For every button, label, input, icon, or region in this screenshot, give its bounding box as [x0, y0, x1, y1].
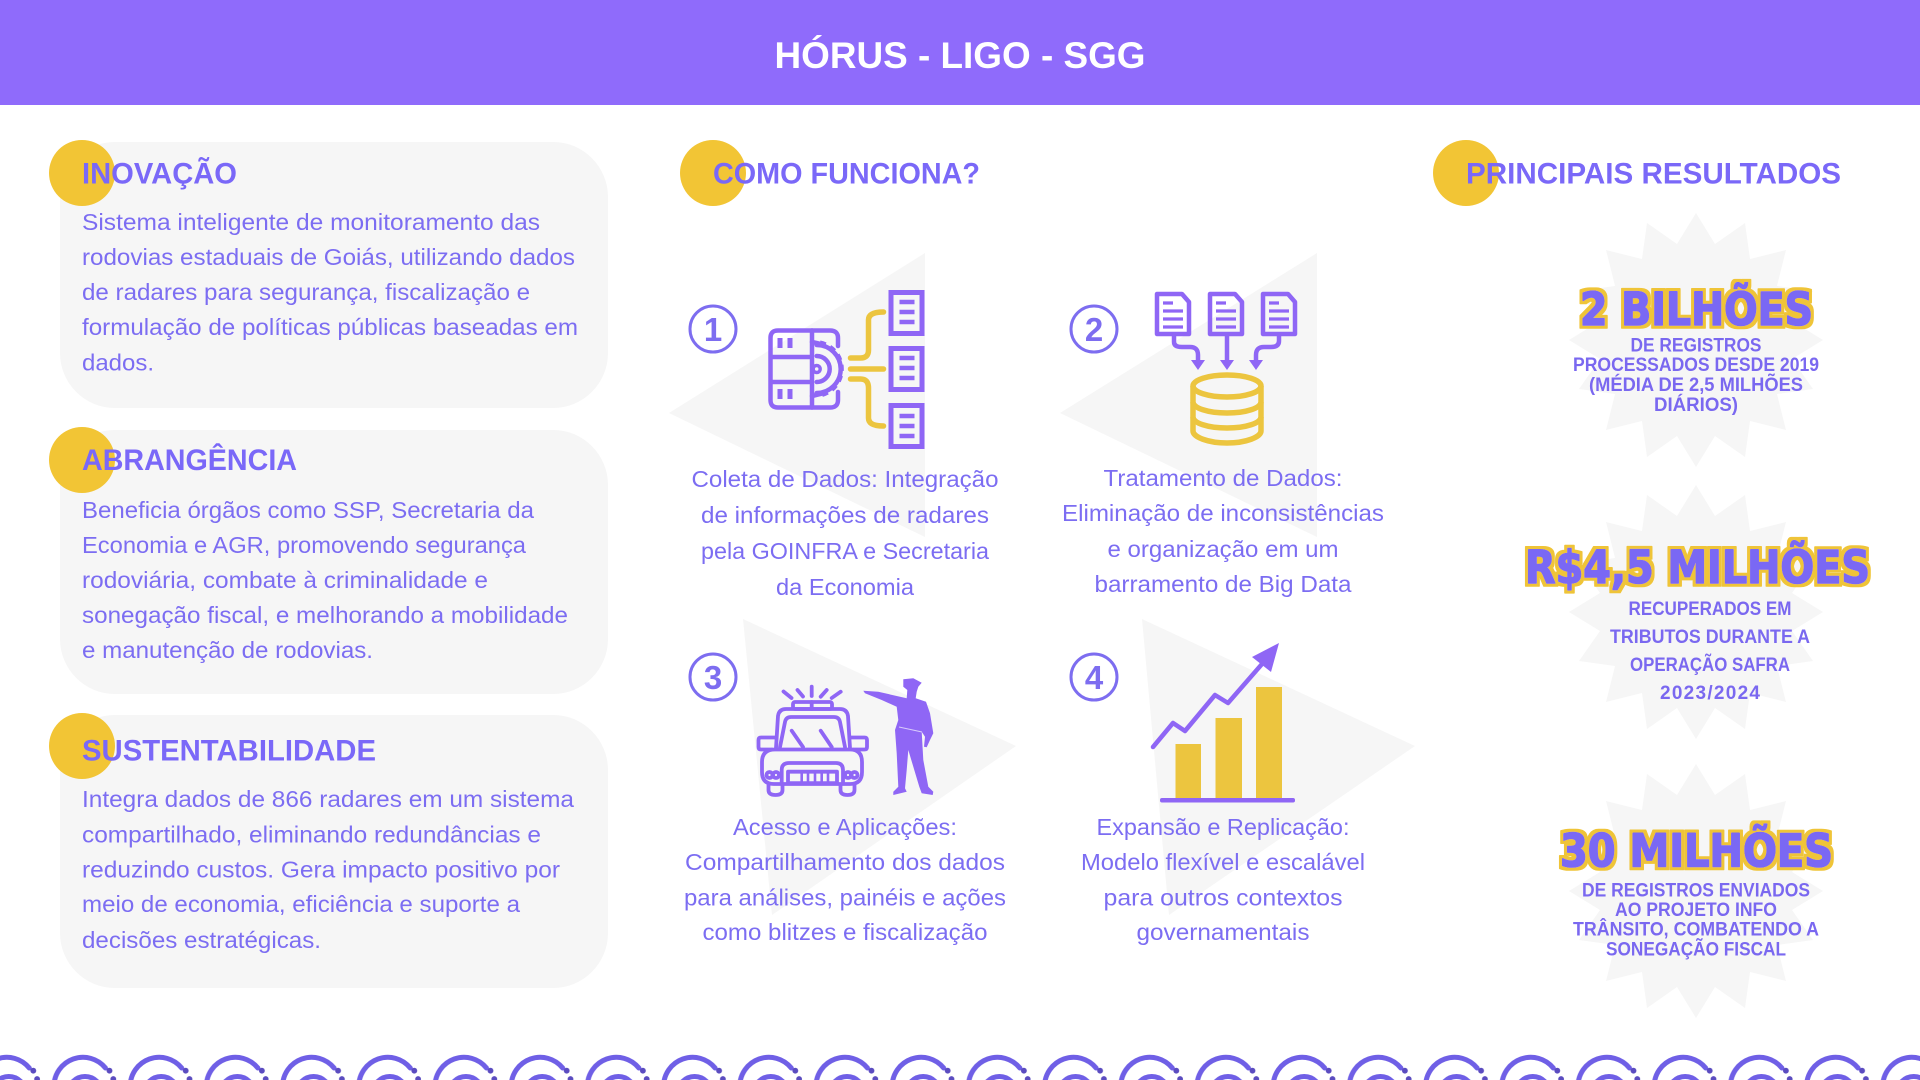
heading: como funciona [680, 140, 980, 206]
text block: result 1: DE REGISTROS [1630, 336, 1762, 356]
text block: inovação [82, 209, 578, 376]
text block: result 3 [1573, 880, 1819, 960]
text block: sustentabilidade: decisões estratégicas. [82, 927, 321, 953]
text block: result 1: PROCESSADOS DESDE 2019 [1573, 355, 1819, 376]
text block: abrangência: rodoviária, combate à criminalidade e [82, 567, 488, 593]
text block: sustentabilidade: meio de economia, eficiência e suporte a [82, 891, 521, 917]
step 1: coleta de dados [669, 253, 998, 600]
text block: result 1: (MÉDIA DE 2,5 MILHÕES [1589, 374, 1803, 396]
text block: sustentabilidade [82, 786, 575, 953]
text block: step 3: Compartilhamento dos dados [685, 849, 1005, 875]
big number: 30 milhões: 30 MILHÕES [1560, 824, 1833, 878]
text block: result 2: 2023/2024 [1660, 683, 1760, 704]
result: r$4,5 milhões [1525, 485, 1870, 739]
panel: abrangência [49, 427, 608, 694]
text block: inovação: formulação de políticas públicas baseadas em [82, 314, 578, 340]
text block: step 3 [684, 814, 1006, 945]
text block: step 4: para outros contextos [1104, 884, 1342, 910]
heading: principais resultados: PRINCIPAIS RESULTADOS [1466, 158, 1841, 190]
text block: abrangência: sonegação fiscal, e melhorando a mobilidade [82, 602, 568, 628]
text block: result 3: TRÂNSITO, COMBATENDO A [1573, 918, 1819, 940]
text block: step 4 [1081, 814, 1365, 945]
text block: result 2: RECUPERADOS EM [1628, 599, 1792, 620]
heading: principais resultados [1433, 140, 1841, 206]
text block: inovação: dados. [82, 350, 154, 376]
text block: result 2: TRIBUTOS DURANTE A [1610, 627, 1810, 648]
text block: step 2 [1062, 465, 1384, 597]
text block: inovação: rodovias estaduais de Goiás, utilizando dados [82, 244, 575, 270]
text block: step 1: pela GOINFRA e Secretaria [701, 538, 990, 564]
text block: result 2 [1610, 599, 1810, 704]
icon: number 1: 1 [704, 311, 722, 348]
heading: sustentabilidade: SUSTENTABILIDADE [82, 734, 376, 768]
text block: abrangência: Economia e AGR, promovendo segurança [82, 532, 527, 558]
icon: number 2 [1071, 306, 1117, 352]
text block: step 4: Expansão e Replicação: [1096, 814, 1350, 840]
big number: 2 bilhões: 2 BILHÕES [1580, 283, 1813, 336]
step 2: tratamento de dados [1060, 253, 1384, 597]
text block: result 3: AO PROJETO INFO [1615, 900, 1777, 921]
icon: growth chart [1153, 643, 1295, 802]
icon: number 3 [690, 654, 736, 700]
text block: sustentabilidade: Integra dados de 866 radares em um sistema [82, 786, 575, 812]
text block: inovação: Sistema inteligente de monitoramento das [82, 209, 540, 235]
icon: number 4: 4 [1085, 659, 1104, 696]
text block: sustentabilidade: compartilhado, eliminando redundâncias e [82, 822, 541, 848]
text block: abrangência: Beneficia órgãos como SSP, Secretaria da [82, 497, 535, 523]
icon: police car [758, 687, 867, 795]
text block: step 2: e organização em um [1108, 536, 1338, 562]
text block: step 4: Modelo flexível e escalável [1081, 849, 1365, 875]
text block: step 2: barramento de Big Data [1094, 571, 1352, 597]
heading: abrangência: ABRANGÊNCIA [82, 443, 297, 477]
text block: result 3: SONEGAÇÃO FISCAL [1606, 938, 1786, 960]
text block: result 3: DE REGISTROS ENVIADOS [1582, 880, 1810, 902]
icon: server and documents [770, 292, 922, 446]
text block: result 1: DIÁRIOS) [1654, 394, 1738, 416]
step 3: acesso e aplicações [684, 619, 1016, 945]
text block: step 1: de informações de radares [701, 502, 989, 528]
title: HÓRUS - LIGO - SGG [774, 34, 1146, 76]
text block: step 3: como blitzes e fiscalização [702, 919, 988, 945]
icon: documents into database [1157, 294, 1295, 443]
text block: step 3: Acesso e Aplicações: [733, 814, 957, 840]
text block: step 2: Eliminação de inconsistências [1062, 500, 1384, 526]
icon: number 4 [1071, 654, 1117, 700]
panel: sustentabilidade [49, 713, 608, 988]
icon: police officer [863, 678, 933, 795]
step 4: expansão e replicação [1071, 619, 1415, 945]
icon: number 3: 3 [704, 659, 722, 696]
text block: result 2: OPERAÇÃO SAFRA [1630, 654, 1790, 676]
result: 2 bilhões [1569, 213, 1823, 467]
icon: number 1 [690, 306, 736, 352]
result: 30 milhões [1560, 764, 1833, 1018]
big number: r$4,5 milhões: R$4,5 MILHÕES [1525, 541, 1870, 594]
text block: step 4: governamentais [1136, 919, 1310, 945]
header banner [0, 0, 1920, 105]
text block: result 1 [1573, 336, 1819, 416]
text block: step 1: da Economia [776, 574, 915, 600]
text block: inovação: de radares para segurança, fiscalização e [82, 279, 530, 305]
text block: abrangência [82, 497, 568, 663]
text block: abrangência: e manutenção de rodovias. [82, 637, 373, 663]
text block: step 1 [692, 466, 998, 600]
panel: inovação [49, 140, 608, 408]
text block: step 1: Coleta de Dados: Integração [692, 466, 998, 492]
heading: inovação: INOVAÇÃO [82, 156, 237, 190]
heading: como funciona: COMO FUNCIONA? [713, 158, 980, 190]
text block: sustentabilidade: reduzindo custos. Gera impacto positivo por [82, 856, 560, 882]
text block: step 3: para análises, painéis e ações [684, 884, 1006, 910]
icon: number 2: 2 [1085, 311, 1103, 348]
text block: step 2: Tratamento de Dados: [1104, 465, 1342, 491]
